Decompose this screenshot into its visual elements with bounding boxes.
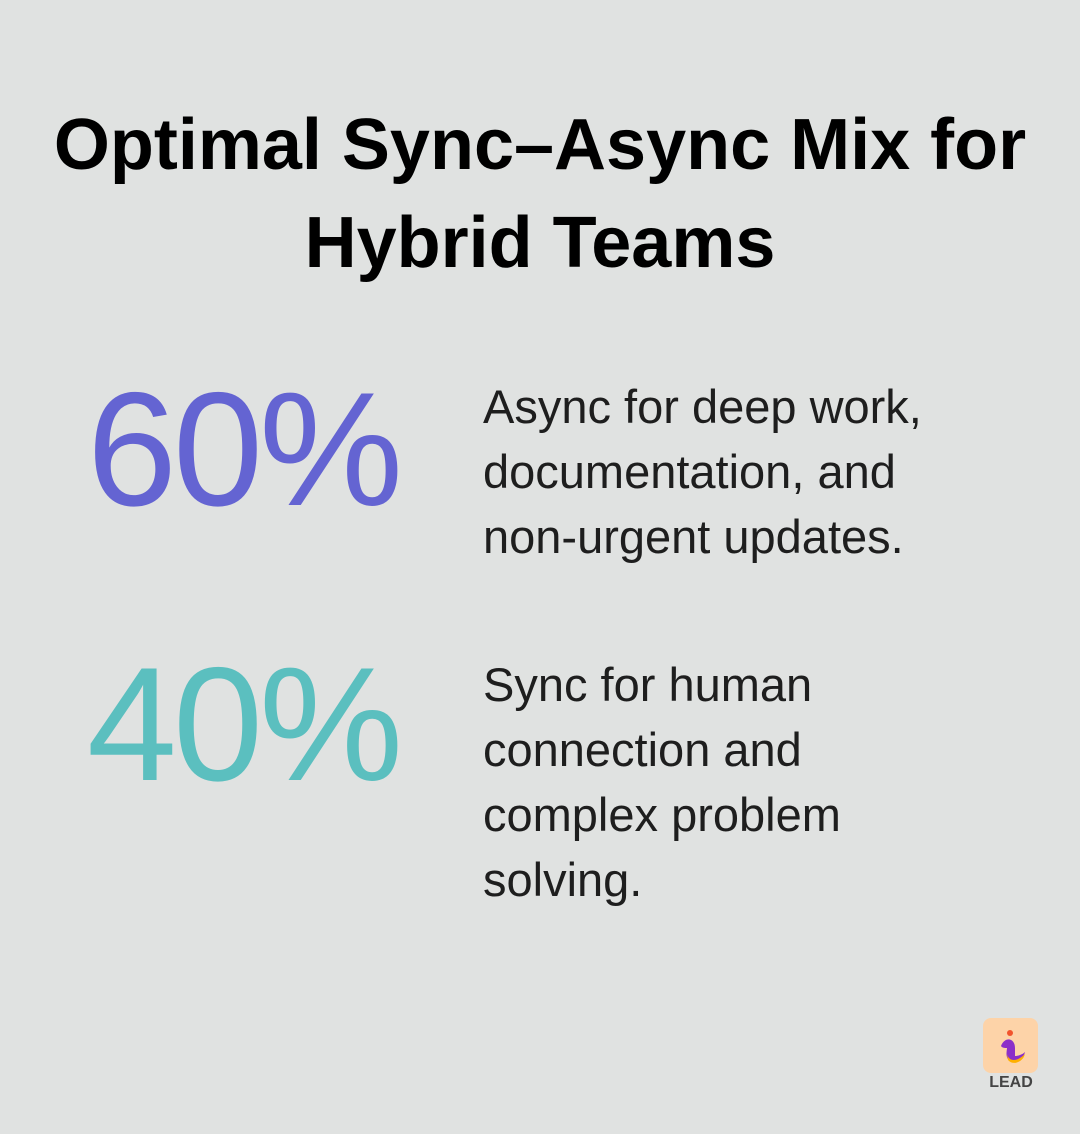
title: Hybrid Teams: [305, 203, 775, 283]
title: Optimal Sync–Async Mix for: [54, 105, 1026, 185]
logo: LEAD: [983, 1018, 1038, 1091]
title: [54, 105, 1026, 283]
icon: logo mark: [983, 1018, 1038, 1073]
text: sync description: [483, 658, 841, 906]
text: async description: Async for deep work,: [483, 380, 922, 433]
text: sync description: complex problem: [483, 788, 841, 841]
text: sync description: solving.: [483, 853, 642, 906]
text: async description: [483, 380, 922, 563]
text: sync description: connection and: [483, 723, 802, 776]
text: LEAD: LEAD: [989, 1074, 1033, 1091]
text: sync description: Sync for human: [483, 658, 812, 711]
stat: 40%: 40%: [87, 634, 399, 815]
text: async description: non-urgent updates.: [483, 510, 904, 563]
stat: 60%: 60%: [87, 359, 399, 540]
text: async description: documentation, and: [483, 445, 896, 498]
